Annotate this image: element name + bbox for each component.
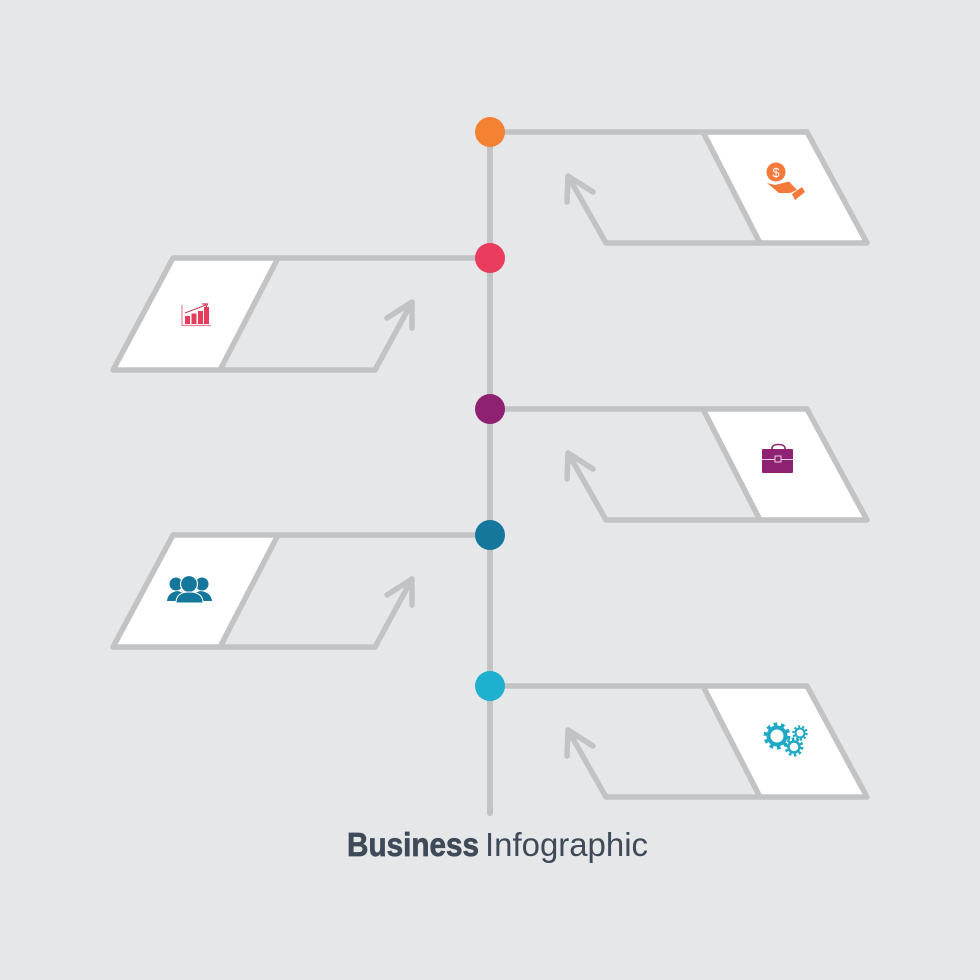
timeline spine	[487, 132, 493, 813]
panel: step 5	[490, 686, 867, 797]
panel: step 4	[113, 535, 490, 647]
icon: gears	[766, 724, 806, 755]
icon: hand holding coin: $	[772, 165, 780, 180]
panel: step 2	[113, 258, 490, 370]
icon: briefcase	[762, 444, 793, 473]
node: purple	[475, 394, 505, 424]
title: Business	[347, 826, 479, 863]
node: cyan	[475, 671, 505, 701]
icon: hand holding coin	[766, 162, 805, 200]
node: red	[475, 243, 505, 273]
panel: step 1	[490, 132, 867, 243]
node: orange	[475, 117, 505, 147]
panel: step 3	[490, 409, 867, 520]
title: Infographic	[485, 826, 648, 863]
node: blue	[475, 520, 505, 550]
icon: group of people	[167, 576, 212, 603]
icon: rising bar chart	[182, 304, 211, 326]
